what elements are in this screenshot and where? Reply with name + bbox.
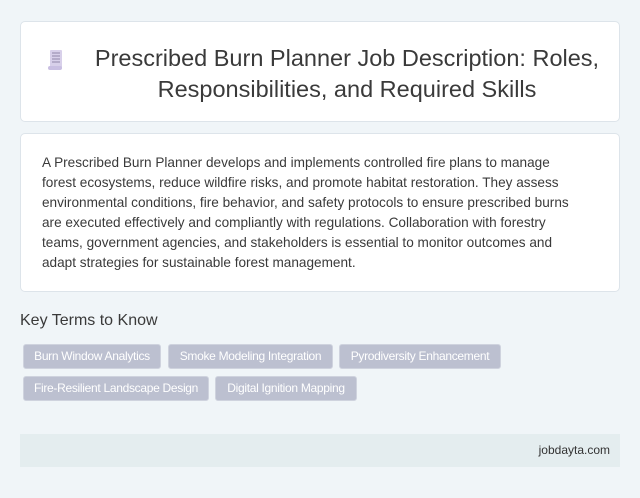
icon: document bbox=[48, 50, 62, 70]
tags: Burn Window Analytics bbox=[34, 349, 150, 363]
key terms heading: Key Terms to Know bbox=[20, 312, 158, 329]
description card bbox=[20, 133, 620, 292]
footer: jobdayta.com bbox=[539, 443, 610, 457]
tags: Digital Ignition Mapping bbox=[227, 381, 345, 395]
description card: A Prescribed Burn Planner develops and implements controlled fire plans to manage forest ecosystems, reduce wildfire risks, and promote habitat restoration. They assess environmental conditions, fire behavior, and safety protocols to ensure prescribed burns are executed effectively and compliantly with regulations. Collaboration with forestry teams, government agencies, and stakeholders is essential to monitor outcomes and adapt strategies for sustainable forest management. bbox=[42, 155, 569, 270]
title: Prescribed Burn Planner Job Description: Roles, Responsibilities, and Required Skills bbox=[95, 45, 599, 102]
tags: Fire-Resilient Landscape Design bbox=[34, 381, 198, 395]
footer bbox=[20, 434, 620, 467]
header card bbox=[20, 21, 620, 122]
tags: Pyrodiversity Enhancement bbox=[351, 349, 489, 363]
tags: Smoke Modeling Integration bbox=[180, 349, 321, 363]
